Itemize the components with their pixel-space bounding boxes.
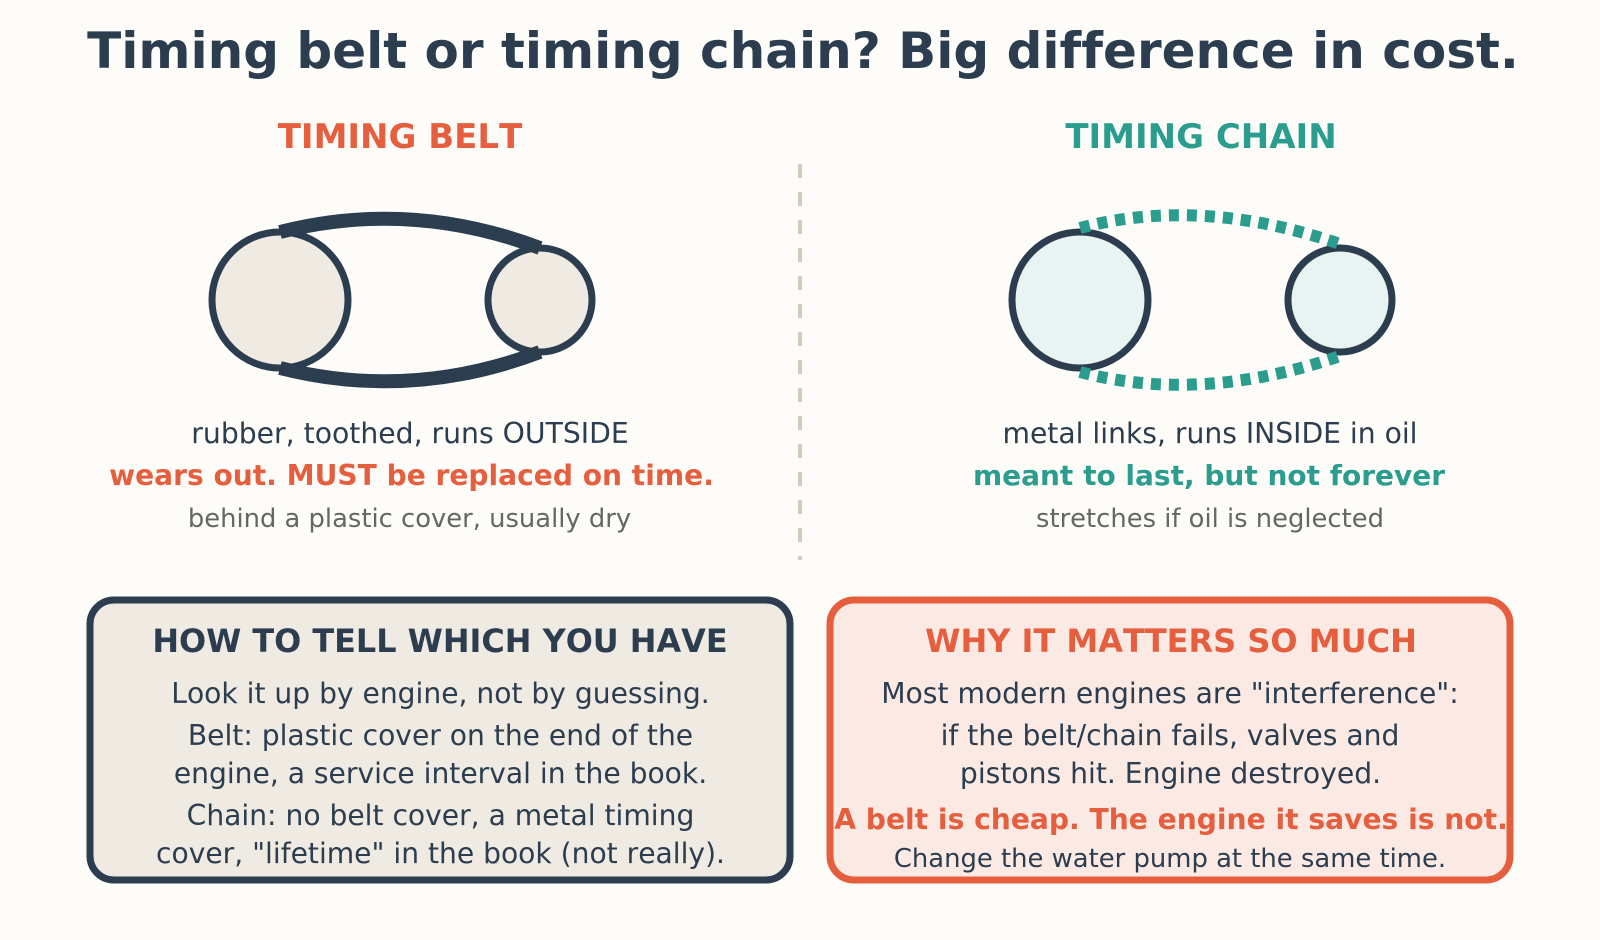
text block: belt description: behind a plastic cover, usually dry xyxy=(188,504,631,534)
panel body: pistons hit. Engine destroyed. xyxy=(960,757,1381,790)
belt lower run xyxy=(280,352,540,381)
panel: how to tell which you have xyxy=(90,600,790,880)
text block: belt description: wears out. MUST be replaced on time. xyxy=(109,459,714,492)
text block: belt description: rubber, toothed, runs OUTSIDE xyxy=(191,417,629,450)
panel body: Most modern engines are "interference": xyxy=(881,677,1459,710)
panel body: engine, a service interval in the book. xyxy=(174,757,707,790)
heading: timing chain: TIMING CHAIN xyxy=(1065,117,1337,157)
diagram: timing belt xyxy=(212,219,592,381)
panel body xyxy=(156,677,725,870)
callout: A belt is cheap. The engine it saves is not. xyxy=(834,803,1508,836)
diagram: timing chain xyxy=(1012,215,1392,385)
panel: why it matters so much xyxy=(830,600,1510,880)
panel body: Chain: no belt cover, a metal timing xyxy=(187,799,694,832)
panel body: cover, "lifetime" in the book (not really). xyxy=(156,837,725,870)
title: Timing belt or timing chain? Big difference in cost. xyxy=(87,22,1519,80)
text block: belt description xyxy=(109,417,714,534)
text block: chain description: stretches if oil is neglected xyxy=(1036,504,1384,534)
panel footnote: Change the water pump at the same time. xyxy=(894,844,1446,874)
icon: large chain sprocket xyxy=(1012,232,1148,368)
icon: small belt pulley xyxy=(488,248,592,352)
chain lower run xyxy=(1080,356,1340,385)
text block: chain description: metal links, runs INSIDE in oil xyxy=(1003,417,1417,450)
text block: chain description: meant to last, but not forever xyxy=(973,459,1445,492)
belt upper run xyxy=(280,219,540,248)
icon: small chain sprocket xyxy=(1288,248,1392,352)
chain upper run xyxy=(1080,215,1340,244)
panel heading: HOW TO TELL WHICH YOU HAVE xyxy=(152,622,728,660)
panel body: if the belt/chain fails, valves and xyxy=(941,719,1399,752)
text block: chain description xyxy=(973,417,1445,534)
panel body: Belt: plastic cover on the end of the xyxy=(188,719,693,752)
panel body: Look it up by engine, not by guessing. xyxy=(171,677,710,710)
panel body xyxy=(881,677,1459,790)
panel heading: WHY IT MATTERS SO MUCH xyxy=(925,622,1417,660)
heading: timing belt: TIMING BELT xyxy=(278,117,523,157)
icon: large belt pulley xyxy=(212,232,348,368)
